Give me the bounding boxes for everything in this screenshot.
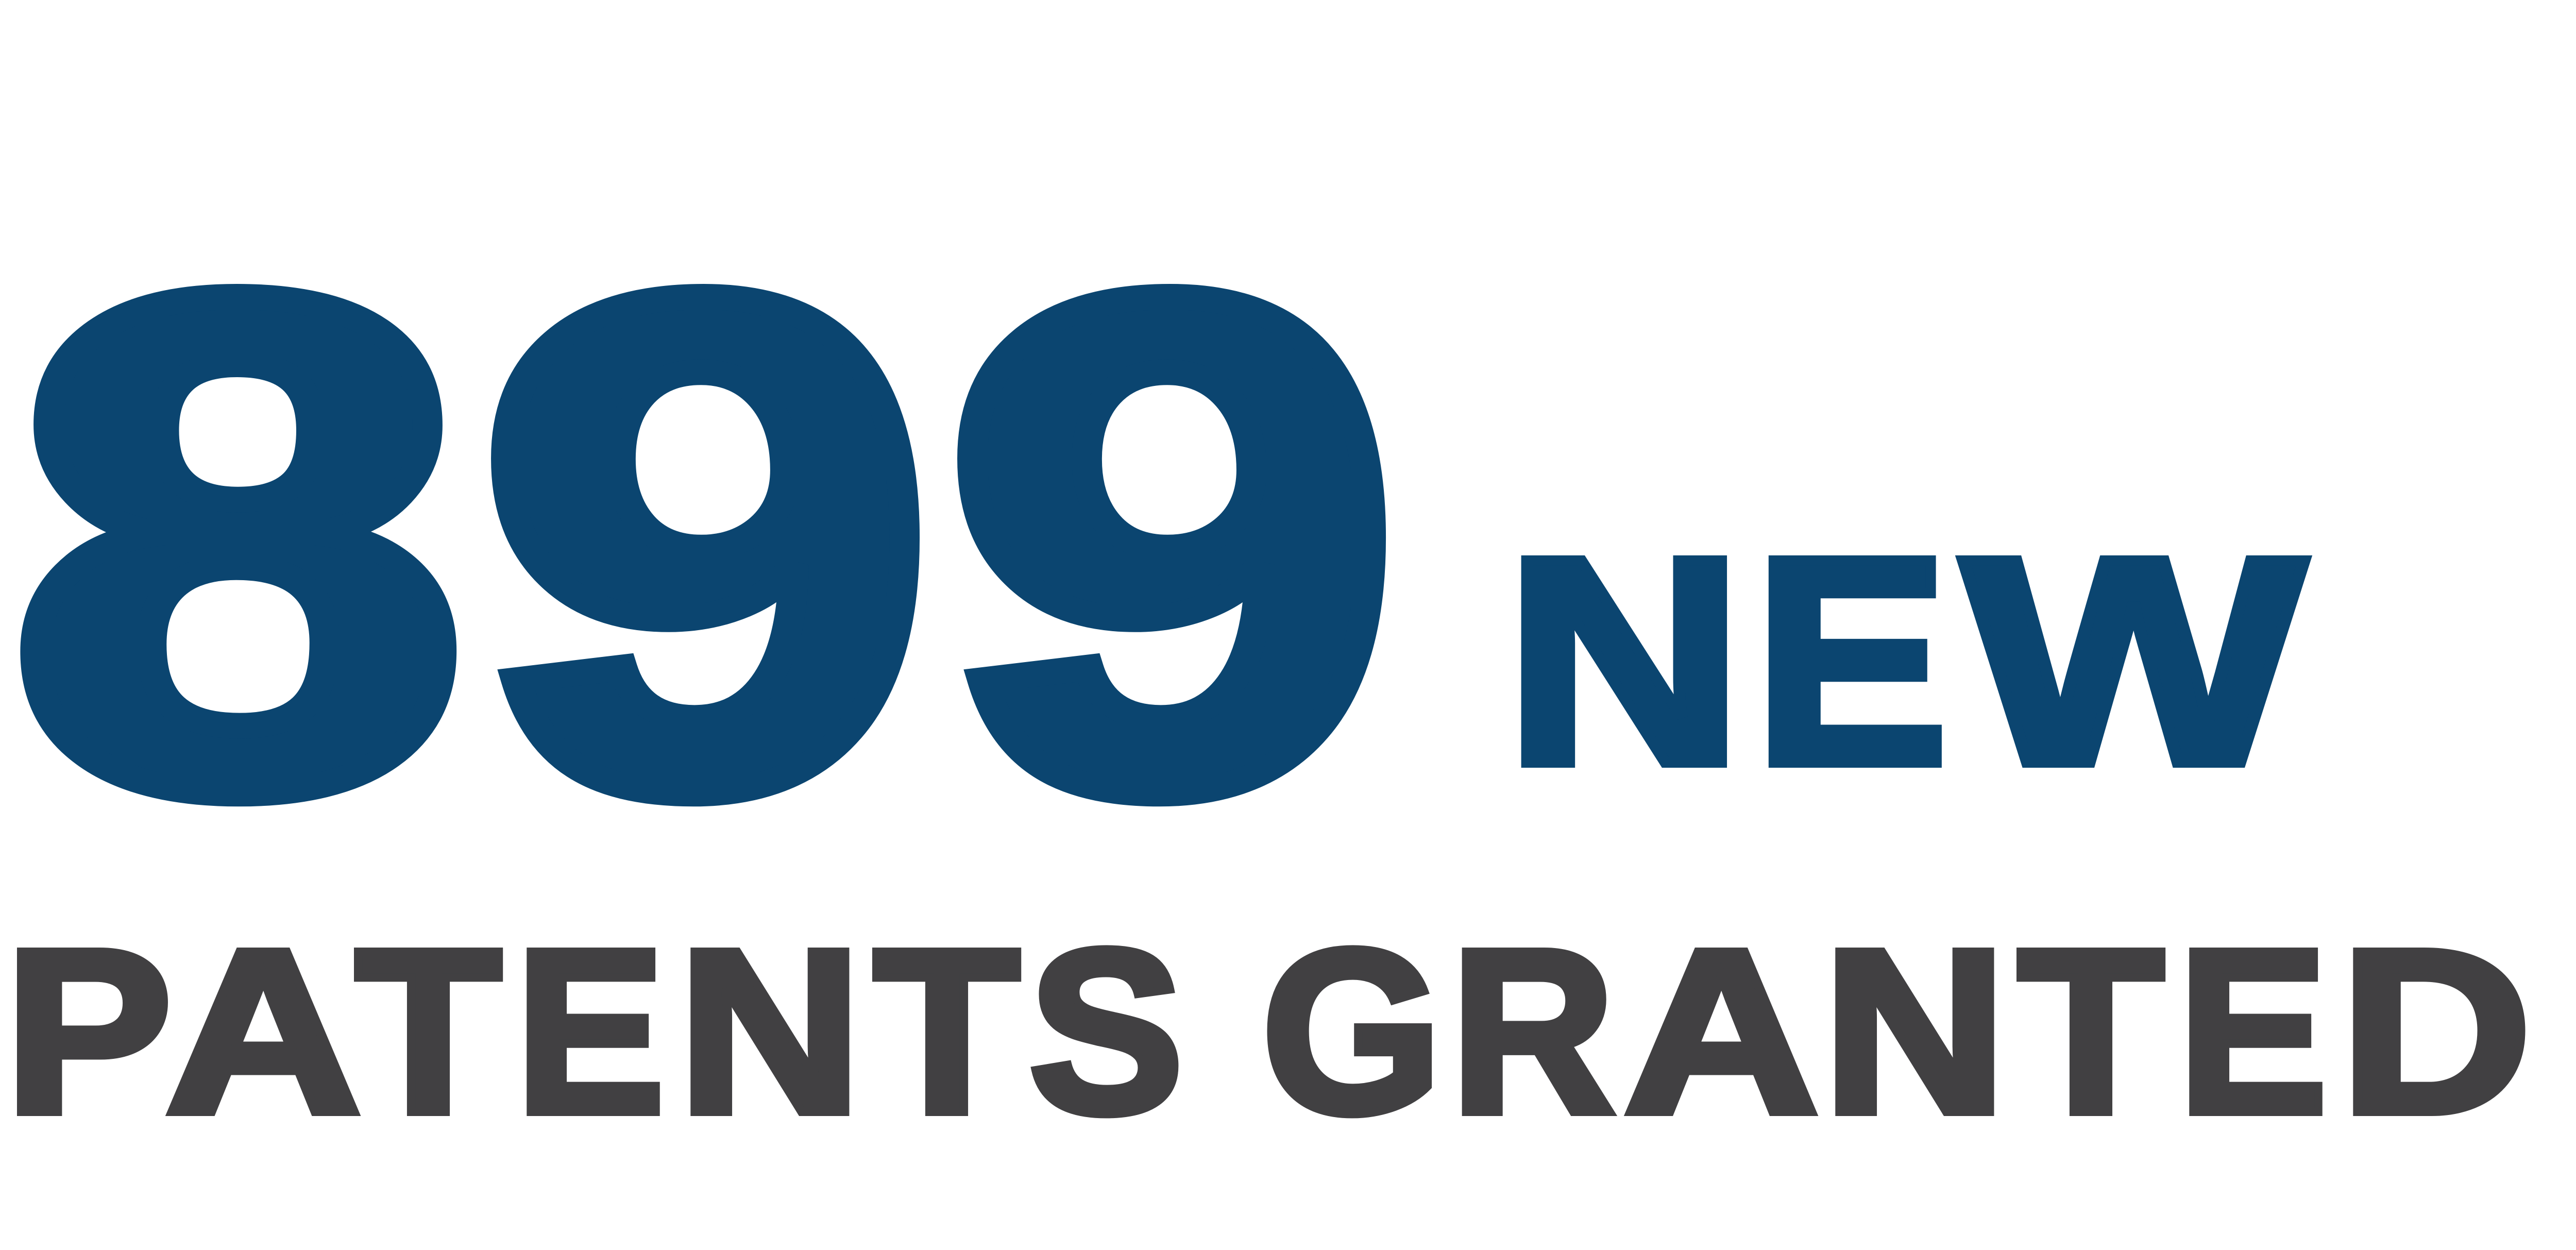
word: GRANTED: G (1262, 901, 1442, 1161)
label: NEW: W (1963, 497, 2308, 825)
word: PATENTS: T (355, 901, 501, 1161)
word: PATENTS: N (678, 901, 862, 1161)
word: GRANTED: D (2340, 901, 2532, 1161)
word: PATENTS: T (874, 901, 1020, 1161)
big number: 899: 9 (944, 151, 1401, 936)
big number: 899: 8 (9, 151, 467, 936)
word: PATENTS: E (516, 901, 665, 1161)
word: PATENTS: A (165, 901, 361, 1161)
word: GRANTED: A (1624, 901, 1819, 1161)
subheading: patents granted (5, 901, 2532, 1161)
label: NEW: N (1505, 497, 1743, 825)
label: NEW: E (1754, 497, 1948, 825)
word: GRANTED: E (2178, 901, 2327, 1161)
headline row: 899 new (9, 151, 2308, 936)
word: PATENTS: P (5, 901, 172, 1161)
big number: 899: 9 (478, 151, 935, 936)
word: PATENTS: S (1029, 901, 1183, 1161)
word: GRANTED: N (1823, 901, 2007, 1161)
word: GRANTED: T (2018, 901, 2164, 1161)
word: GRANTED: R (1451, 901, 1615, 1161)
